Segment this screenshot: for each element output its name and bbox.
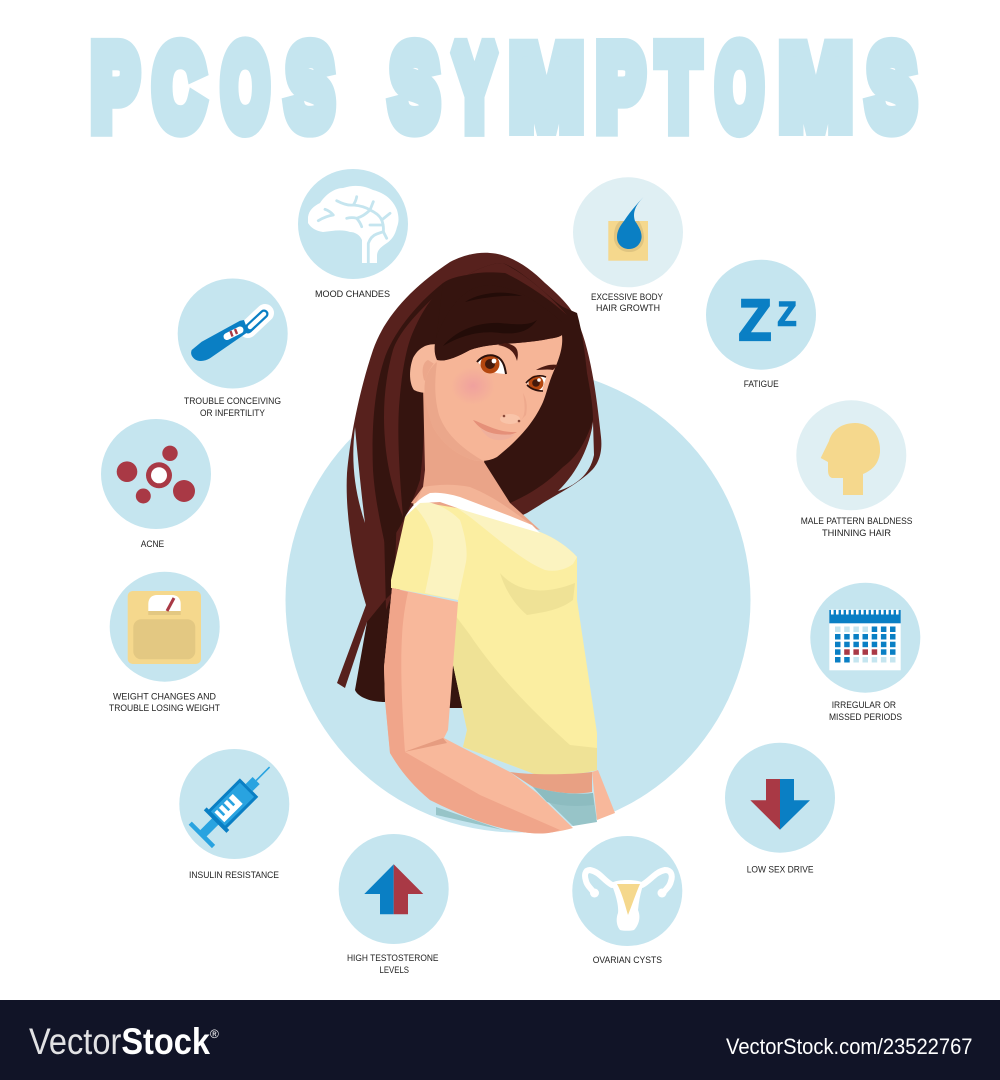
hair right slit [558, 422, 594, 491]
label: irregular periods: MISSED PERIODS [829, 712, 902, 723]
label: excessive body hair [591, 292, 664, 314]
label: excessive body hair: EXCESSIVE BODY [591, 292, 664, 303]
eyebrows [498, 343, 558, 370]
title: Y [453, 23, 496, 152]
woman illustration [337, 253, 615, 834]
eye left [477, 354, 506, 374]
nose [500, 393, 527, 424]
label: trouble conceiving: OR INFERTILITY [200, 408, 266, 419]
label: low sex drive: LOW SEX DRIVE [747, 865, 814, 876]
elbow crease [404, 738, 447, 752]
label: male pattern baldness: MALE PATTERN BALDNESS [801, 516, 912, 527]
icon: sleep z letters: Z [778, 296, 796, 334]
registered mark: ® [210, 1027, 219, 1041]
hair dark left side [373, 283, 470, 545]
hair dark lower back [355, 490, 464, 708]
icon: up arrow [339, 834, 449, 944]
label: high testosterone: LEVELS [380, 965, 409, 976]
icon: down arrow [725, 743, 835, 853]
label: trouble conceiving: TROUBLE CONCEIVING [184, 396, 281, 407]
label: irregular periods: IRREGULAR OR [832, 700, 896, 711]
hair bang shadows [443, 293, 537, 346]
icon: sleep z letters: Z [738, 288, 772, 353]
title: S [287, 24, 333, 152]
label: high testosterone: HIGH TESTOSTERONE [347, 953, 438, 964]
footer logo: VectorStock [29, 1021, 210, 1062]
icon: weight scale [110, 572, 220, 682]
title: S [391, 24, 438, 152]
ear [410, 344, 440, 393]
neck and chest [411, 385, 540, 530]
collar [405, 493, 540, 533]
title [92, 23, 915, 152]
eye right [526, 376, 546, 391]
hair highlight strip [384, 299, 432, 517]
face [424, 335, 562, 461]
cheek blush [451, 367, 495, 405]
label: weight changes: WEIGHT CHANGES AND [113, 692, 216, 702]
icon: pregnancy test [178, 278, 288, 388]
hand [592, 770, 615, 820]
hair dark top [436, 263, 593, 503]
title: M [510, 23, 583, 152]
label: excessive body hair: HAIR GROWTH [596, 303, 660, 314]
title: C [154, 24, 204, 152]
label: mood changes: MOOD CHANDES [315, 289, 390, 300]
label: acne: ACNE [141, 539, 164, 550]
icon: head profile [796, 400, 906, 510]
title: O [717, 24, 762, 152]
icon: brain [298, 169, 408, 279]
arm shading [384, 588, 560, 834]
face shading [424, 362, 485, 462]
shorts [436, 787, 597, 830]
icon: ovaries [572, 836, 682, 946]
hair bangs [435, 285, 562, 361]
hair silhouette [337, 253, 601, 702]
label: male pattern baldness [801, 516, 912, 539]
label: weight changes [109, 692, 220, 714]
shirt highlights [413, 502, 577, 600]
title: P [92, 24, 138, 152]
icon: acne [101, 419, 211, 529]
title: P [597, 24, 644, 152]
title: T [658, 23, 699, 151]
hair top highlight [467, 263, 567, 315]
label: weight changes: TROUBLE LOSING WEIGHT [109, 703, 220, 714]
icon: sleep z letters [706, 260, 816, 370]
title: M [780, 23, 852, 152]
lips [473, 420, 517, 440]
icon: calendar [810, 583, 920, 693]
label: fatigue: FATIGUE [744, 379, 779, 390]
title: S [868, 24, 915, 152]
icon: hair follicle [573, 177, 683, 287]
label: male pattern baldness: THINNING HAIR [822, 528, 891, 539]
label: insulin resistance: INSULIN RESISTANCE [189, 870, 279, 881]
shirt [391, 502, 597, 775]
label: trouble conceiving [184, 396, 281, 419]
arm [384, 588, 573, 833]
footer image id: VectorStock.com/23522767 [726, 1034, 972, 1059]
hair left slit [353, 427, 365, 523]
icon: syringe [179, 749, 289, 859]
midriff [510, 772, 592, 793]
title: O [222, 24, 268, 152]
large background circle [286, 368, 750, 832]
shirt shadows [452, 573, 597, 775]
label: high testosterone [347, 953, 438, 976]
label: ovarian cysts: OVARIAN CYSTS [593, 955, 662, 966]
footer bar [0, 1000, 1000, 1080]
label: irregular periods [829, 700, 902, 723]
